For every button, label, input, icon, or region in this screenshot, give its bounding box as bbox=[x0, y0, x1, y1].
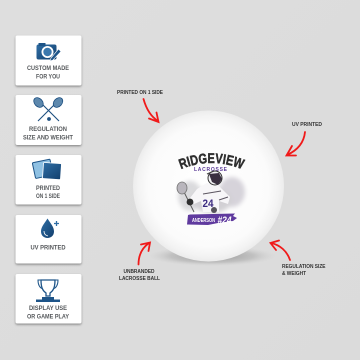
label: or game play: OR GAME PLAY bbox=[27, 313, 70, 320]
purple name banner: ANDERSON bbox=[192, 218, 215, 224]
label: printed: PRINTED bbox=[36, 185, 60, 192]
lacrosse ball bbox=[133, 110, 284, 262]
label: for you: FOR YOU bbox=[36, 73, 60, 80]
arrow bbox=[270, 240, 290, 260]
arrow bbox=[286, 132, 305, 156]
label: UV PRINTED bbox=[30, 244, 66, 252]
icon: camera and pencil bbox=[36, 43, 61, 61]
purple name banner: #24 bbox=[218, 216, 232, 226]
card: custom made for you bbox=[16, 36, 82, 86]
card: display use or game play bbox=[16, 274, 82, 324]
callout: printed on 1 side: PRINTED ON 1 SIDE bbox=[117, 90, 163, 96]
card: regulation size and weight bbox=[16, 95, 82, 145]
callout: uv printed bbox=[286, 122, 322, 156]
callout: unbranded lacrosse ball bbox=[119, 242, 160, 282]
second glove bbox=[211, 207, 217, 213]
label: unbranded: UNBRANDED bbox=[124, 269, 154, 275]
label: size and weight: SIZE AND WEIGHT bbox=[23, 134, 73, 141]
helmet stripe bbox=[207, 171, 214, 174]
ball shadow bbox=[148, 246, 276, 266]
purple name banner bbox=[187, 214, 237, 226]
icon: trophy bbox=[36, 280, 60, 302]
label: and weight: & WEIGHT bbox=[282, 271, 306, 277]
card: uv printed bbox=[16, 215, 82, 264]
arrow bbox=[138, 242, 150, 264]
label: regulation: REGULATION bbox=[29, 126, 67, 133]
label: display use: DISPLAY USE bbox=[29, 305, 67, 312]
callout: regulation size and weight bbox=[270, 240, 326, 277]
callout: printed on 1 side bbox=[117, 90, 163, 122]
icon: crossed lacrosse sticks bbox=[32, 96, 65, 121]
label: lacrosse ball: LACROSSE BALL bbox=[119, 276, 160, 282]
label: custom made: CUSTOM MADE bbox=[27, 65, 69, 72]
jersey trim bbox=[203, 191, 228, 200]
smoke backdrop bbox=[178, 177, 245, 213]
team name: RIDGEVIEW bbox=[178, 153, 246, 170]
arrow bbox=[144, 99, 158, 122]
label: on 1 side: ON 1 SIDE bbox=[36, 193, 60, 200]
subtitle: LACROSSE bbox=[194, 167, 228, 173]
glove bbox=[187, 199, 193, 205]
jersey number: 24 bbox=[202, 198, 214, 210]
stick bbox=[183, 190, 194, 212]
printed graphic bbox=[176, 153, 246, 226]
helmet bbox=[208, 171, 222, 185]
callout: uv printed: UV PRINTED bbox=[292, 122, 322, 128]
icon: printed photos bbox=[32, 159, 62, 180]
icon: water drop bbox=[41, 218, 59, 238]
card: printed on 1 side bbox=[16, 155, 82, 204]
jersey bbox=[190, 183, 230, 212]
label: regulation size: REGULATION SIZE bbox=[282, 264, 326, 270]
